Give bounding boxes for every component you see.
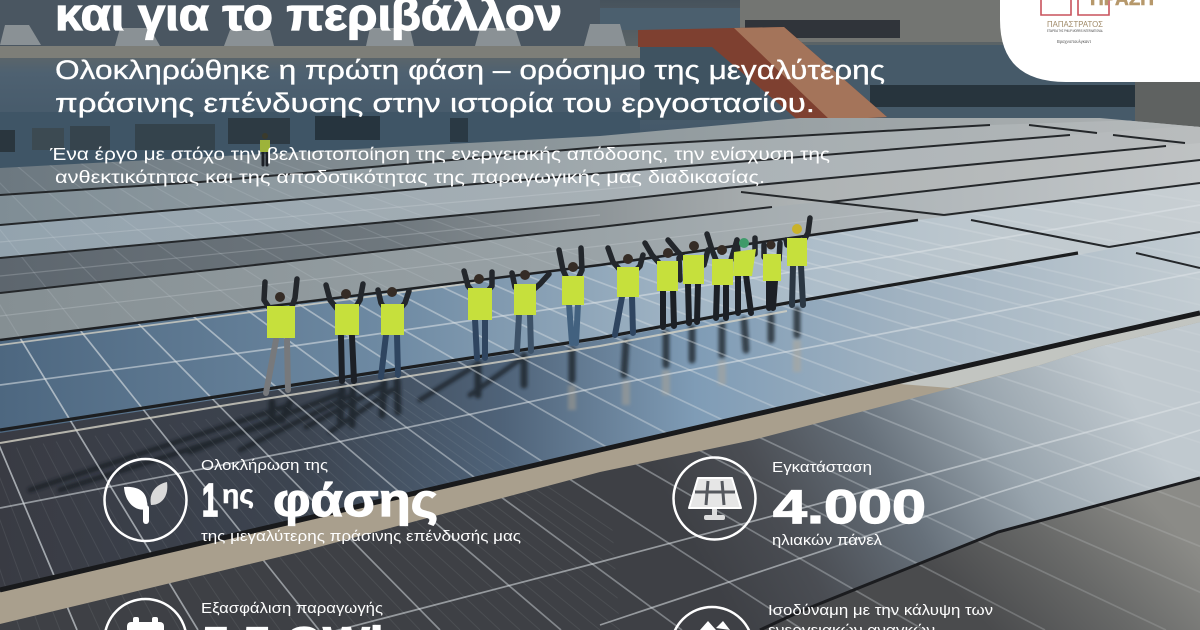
worker 5 xyxy=(512,270,549,351)
icon: solar panel xyxy=(674,458,756,540)
background photo: factory building xyxy=(0,0,1200,175)
caption: ηλιακών πάνελ xyxy=(772,533,883,549)
caption: της μεγαλύτερης πράσινης επένδυσής μας xyxy=(201,529,521,545)
red ramp roof xyxy=(638,27,887,122)
panel grid: row mid lines xyxy=(0,205,1200,630)
stat: production xyxy=(104,599,400,630)
worker 2 xyxy=(326,284,363,381)
worker 8 xyxy=(645,243,680,327)
intro text: Ένα έργο με στόχο την βελτιστοποίηση της ενεργειακής απόδοσης, την ενίσχυση της xyxy=(49,144,830,164)
panel grid: cross lines, lower rows xyxy=(0,213,1200,630)
value xyxy=(202,474,438,526)
lone worker on the roof xyxy=(260,133,270,165)
panel grid: fine cell lines xyxy=(0,390,620,630)
value: φάσης xyxy=(273,474,438,526)
logo squares xyxy=(1041,0,1109,15)
worker 1 xyxy=(264,279,297,393)
stat: first phase xyxy=(104,458,521,545)
value: 4.000 xyxy=(773,480,926,533)
logo sub-brand: Βραχνοπουλγκαντ xyxy=(1057,39,1091,44)
subtitle: Ολοκληρώθηκε η πρώτη φάση – ορόσημο της μεγαλύτερης xyxy=(55,55,885,85)
worker 6 xyxy=(559,248,584,343)
subtitle: πράσινης επένδυσης στην ιστορία του εργοστασίου. xyxy=(55,88,815,118)
label: Ολοκλήρωση της xyxy=(201,458,328,474)
worker 9 xyxy=(668,240,708,323)
logo panel xyxy=(1000,0,1200,82)
label: Εγκατάσταση xyxy=(772,460,872,476)
panel grid: cross lines, upper rows xyxy=(0,153,602,336)
icon: houses xyxy=(671,607,753,630)
worker 3 xyxy=(378,287,409,377)
logo company name: ΠΑΠΑΣΤΡΑΤΟΣ xyxy=(1047,20,1103,29)
beige maintenance strip xyxy=(0,315,1200,624)
value: ης xyxy=(222,479,254,509)
row separators xyxy=(0,125,1200,293)
stat: households xyxy=(671,603,993,630)
stat: solar panels xyxy=(674,458,926,549)
value: 1 xyxy=(202,474,218,526)
subtitle xyxy=(55,55,885,118)
team of workers with raised arms xyxy=(264,218,810,393)
worker 7 xyxy=(608,248,643,335)
worker 13 xyxy=(786,218,810,305)
logo tagline: ΕΤΑΙΡΕΙΑ ΤΗΣ PHILIP MORRIS INTERNATIONAL xyxy=(1047,29,1103,33)
icon: sprout xyxy=(104,459,186,541)
intro text xyxy=(49,144,830,187)
label: Ισοδύναμη με την κάλυψη των xyxy=(768,603,993,619)
worker 10 xyxy=(707,234,737,318)
intro text: ανθεκτικότητας και της αποδοτικότητας της παραγωγικής μας διαδικασίας. xyxy=(55,167,765,187)
icon: calendar xyxy=(104,599,186,630)
team shadows and reflections xyxy=(30,310,797,490)
worker 11 xyxy=(733,238,756,313)
label: Εξασφάλιση παραγωγής xyxy=(201,601,383,617)
worker 4 xyxy=(464,271,492,358)
worker 12 xyxy=(763,240,781,308)
